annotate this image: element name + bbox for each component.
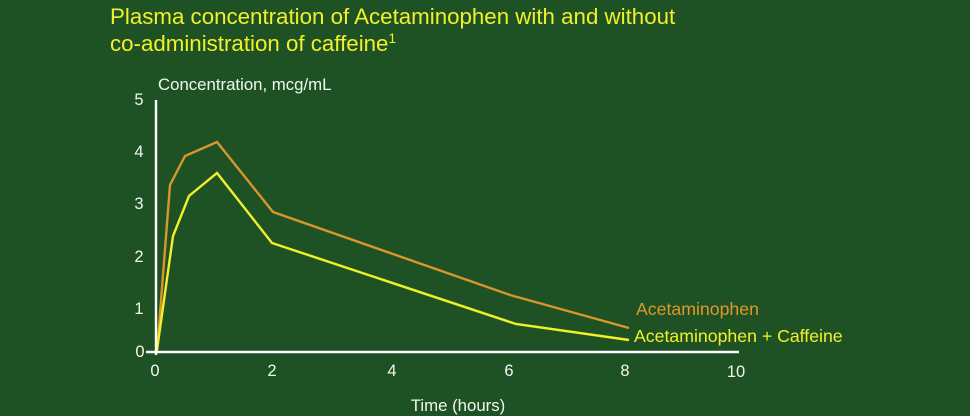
x axis title: Time (hours): [411, 396, 505, 415]
title: [110, 4, 676, 56]
label: acetaminophen: Acetaminophen: [636, 299, 759, 319]
x axis tick labels: [150, 362, 745, 381]
title: co-administration of caffeine: [110, 31, 388, 56]
x axis tick labels: 0: [150, 362, 160, 380]
y axis tick labels: [134, 91, 145, 361]
y axis tick labels: 4: [134, 143, 144, 161]
title: Plasma concentration of Acetaminophen with and without: [110, 4, 676, 29]
x axis tick labels: 2: [267, 362, 277, 380]
axes: [146, 100, 739, 355]
y axis title: Concentration, mcg/mL: [158, 75, 331, 94]
line: acetaminophen: [157, 142, 629, 352]
y axis tick labels: 2: [134, 248, 144, 266]
y axis tick labels: 5: [134, 91, 144, 109]
y axis tick labels: 3: [134, 195, 144, 213]
x axis tick labels: 4: [387, 362, 397, 380]
x axis tick labels: 8: [620, 362, 630, 380]
title: 1: [388, 31, 396, 46]
y axis tick labels: 1: [134, 300, 144, 318]
y axis tick labels: 0: [135, 343, 145, 361]
x axis tick labels: 10: [727, 363, 745, 381]
label: acetaminophen + caffeine: Acetaminophen + Caffeine: [634, 326, 843, 346]
x axis tick labels: 6: [504, 362, 514, 380]
line: acetaminophen + caffeine: [157, 173, 629, 350]
